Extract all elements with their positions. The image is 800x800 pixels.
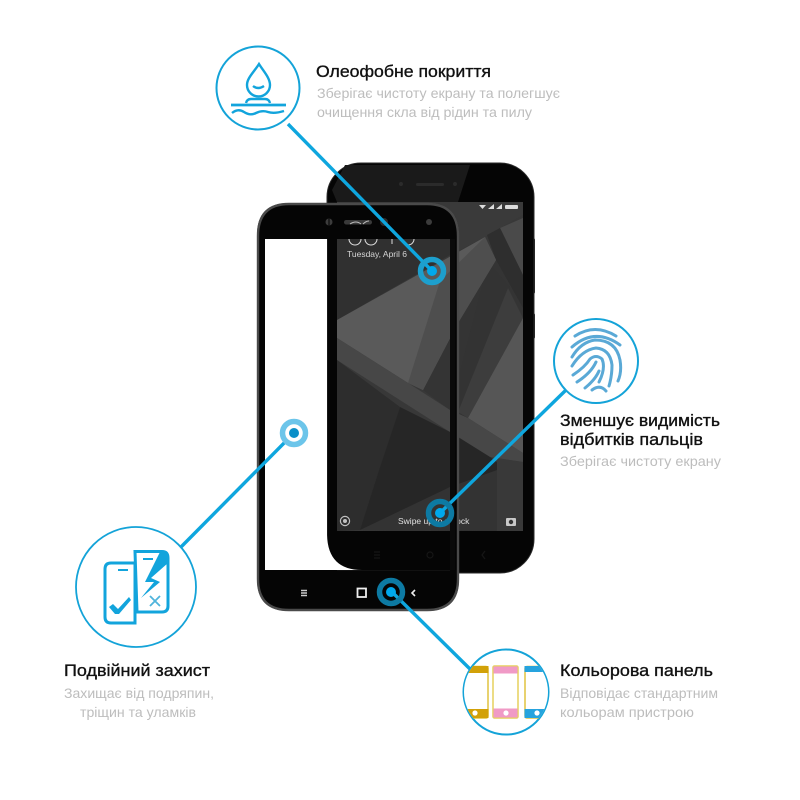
clock outline	[349, 239, 414, 245]
back phone speaker and sensors	[399, 182, 457, 186]
description: Зберігає чистоту екрану	[560, 453, 721, 469]
heading: Подвійний захист	[64, 661, 210, 680]
lock screen icon: camera	[506, 518, 516, 526]
description: кольорам пристрою	[560, 704, 694, 720]
description: очищення скла від рідин та пилу	[317, 104, 532, 120]
node	[380, 580, 402, 604]
connector line	[181, 433, 294, 547]
heading: відбитків пальців	[560, 430, 703, 449]
icon: fingerprint	[572, 330, 621, 391]
description	[317, 85, 560, 120]
callout: colored panel	[380, 580, 718, 734]
icon: phones	[460, 666, 555, 718]
status icons	[479, 204, 518, 209]
date text: Tuesday, April 6	[347, 249, 407, 259]
description: Захищає від подряпин,	[64, 685, 214, 701]
callout: fingerprints	[428, 319, 721, 524]
icon circle	[554, 319, 638, 403]
icon: two phones	[105, 552, 168, 623]
back phone wallpaper	[337, 202, 523, 531]
front nav: menu	[301, 590, 307, 596]
front nav: home	[358, 588, 366, 597]
icon: water drop	[231, 64, 286, 114]
description	[64, 685, 214, 720]
heading: Зменшує видимість	[560, 411, 720, 430]
heading: Кольорова панель	[560, 661, 713, 680]
swipe text: Swipe up to unlock	[398, 516, 470, 526]
icon circle	[216, 46, 300, 130]
icon: pink phone	[493, 666, 518, 718]
icon circle	[76, 527, 196, 647]
heading: Олеофобне покриття	[316, 62, 491, 81]
front nav: back	[412, 590, 415, 596]
back phone	[327, 163, 535, 573]
callout: oleophobic coating	[216, 46, 560, 282]
icon circle	[464, 650, 548, 734]
node	[428, 502, 452, 524]
back phone nav keys	[374, 551, 485, 559]
node	[282, 422, 306, 444]
front camera and sensor	[326, 218, 432, 226]
icon: gold phone	[460, 666, 488, 718]
front glass	[257, 203, 459, 611]
connector line	[288, 124, 432, 271]
connector line	[392, 592, 471, 670]
callout: double protection	[64, 422, 306, 720]
node	[420, 260, 444, 282]
connector line	[440, 390, 566, 513]
lock screen icon: left	[340, 516, 350, 526]
description	[560, 685, 718, 720]
description: Зберігає чистоту екрану та полегшує	[317, 85, 560, 101]
icon: blue phone	[524, 666, 548, 719]
description: Відповідає стандартним	[560, 685, 718, 701]
description: тріщин та уламків	[80, 704, 196, 720]
heading	[560, 411, 720, 449]
